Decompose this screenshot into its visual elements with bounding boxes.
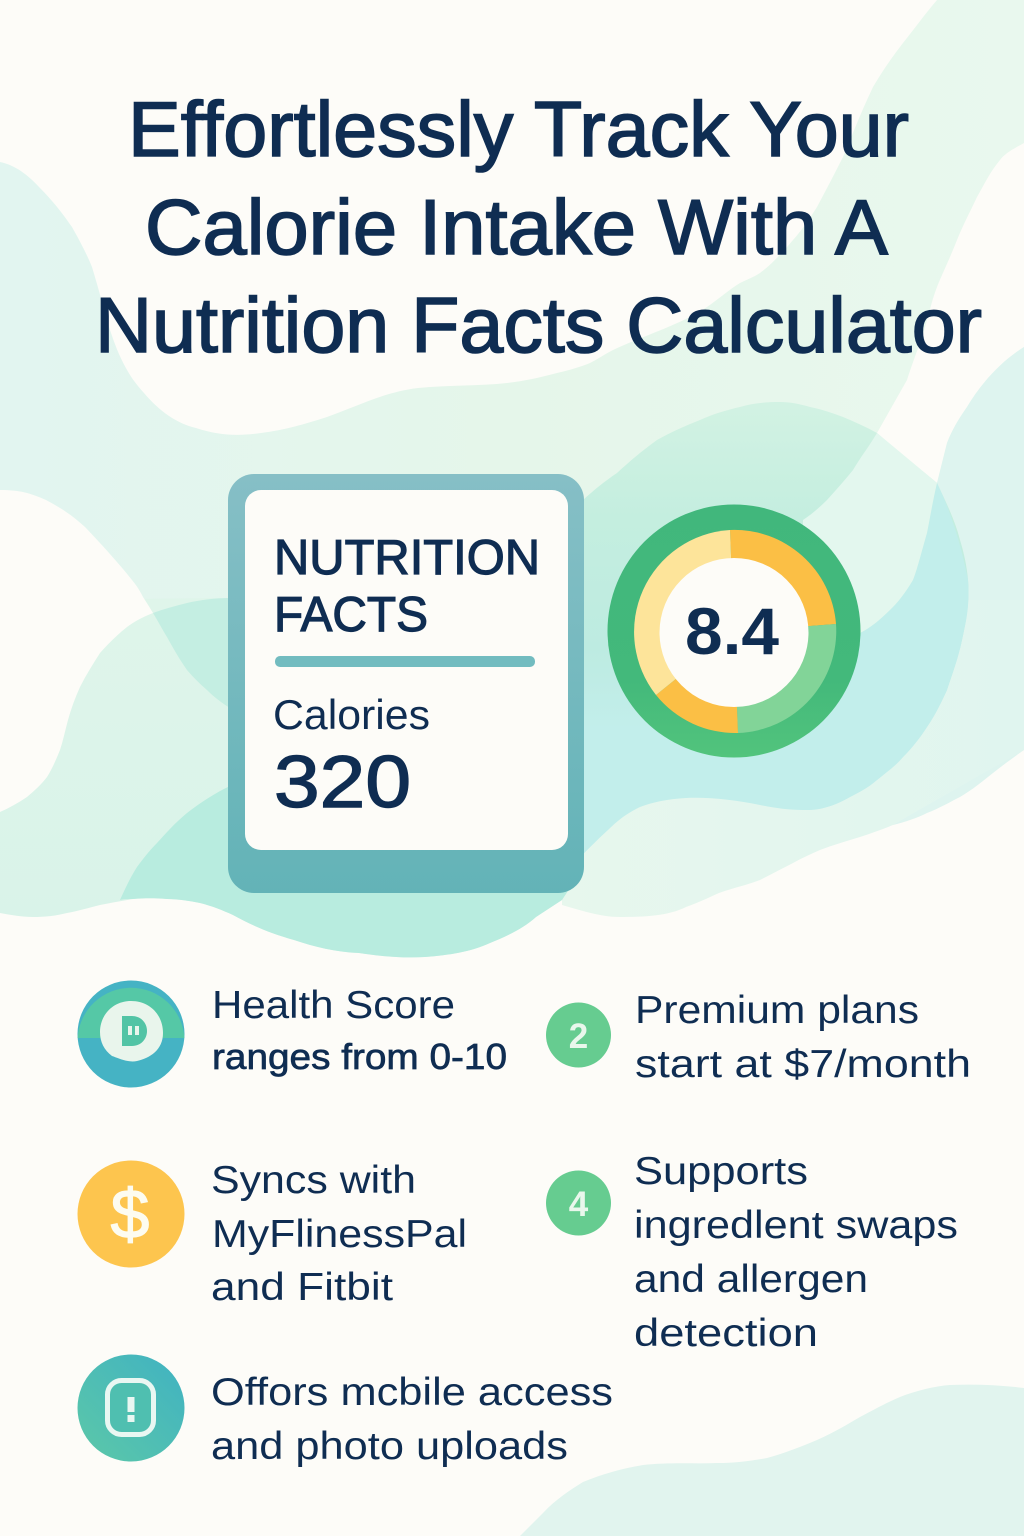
title <box>95 85 982 369</box>
text: mobile access: and photo uploads <box>211 1425 568 1468</box>
text: premium plans: Premium plans <box>635 989 919 1032</box>
icon: number 4 <box>546 1170 611 1236</box>
text: supports: detection <box>634 1312 818 1355</box>
icon: health score badge <box>78 980 184 1088</box>
text: syncs <box>211 1159 467 1309</box>
item: syncs <box>78 1159 467 1309</box>
icon: dollar <box>78 1160 184 1268</box>
card heading: NUTRITION <box>274 531 540 585</box>
text: health score: Health Score <box>212 984 455 1027</box>
text: syncs: Syncs with <box>211 1159 416 1202</box>
icon: number 4: 4 <box>569 1185 589 1224</box>
text: health score <box>212 984 507 1077</box>
icon: number 2: 2 <box>569 1017 588 1056</box>
text: premium plans: start at $7/month <box>635 1043 971 1086</box>
text: syncs: MyFlinessPal <box>212 1213 467 1256</box>
text: mobile access <box>211 1371 613 1468</box>
item: health score <box>78 980 507 1088</box>
text: supports: and allergen <box>634 1258 868 1301</box>
title: Nutrition Facts Calculator <box>95 281 982 369</box>
item: premium plans <box>546 989 971 1086</box>
text: supports: ingredlent swaps <box>634 1204 958 1247</box>
item: supports <box>546 1150 958 1355</box>
item: mobile access <box>78 1354 613 1468</box>
icon: dollar: $ <box>111 1175 149 1253</box>
score value: 8.4 <box>685 594 779 668</box>
calories value: 320 <box>274 742 411 823</box>
card heading: FACTS <box>274 588 428 642</box>
text: supports: Supports <box>634 1150 808 1193</box>
title: Calorie Intake With A <box>145 183 888 271</box>
chart: health score donut <box>608 504 860 758</box>
text: premium plans <box>635 989 971 1086</box>
icon: number 2 <box>546 1002 611 1068</box>
text: supports <box>634 1150 958 1355</box>
icon: phone badge <box>78 1354 184 1462</box>
panel: nutrition facts card <box>228 474 584 893</box>
title: Effortlessly Track Your <box>128 85 909 173</box>
text: syncs: and Fitbit <box>211 1266 393 1309</box>
text: mobile access: Offors mcbile access <box>211 1371 613 1414</box>
text: health score: ranges from 0-10 <box>212 1036 507 1077</box>
calories label: Calories <box>273 691 430 738</box>
card heading <box>274 531 540 642</box>
